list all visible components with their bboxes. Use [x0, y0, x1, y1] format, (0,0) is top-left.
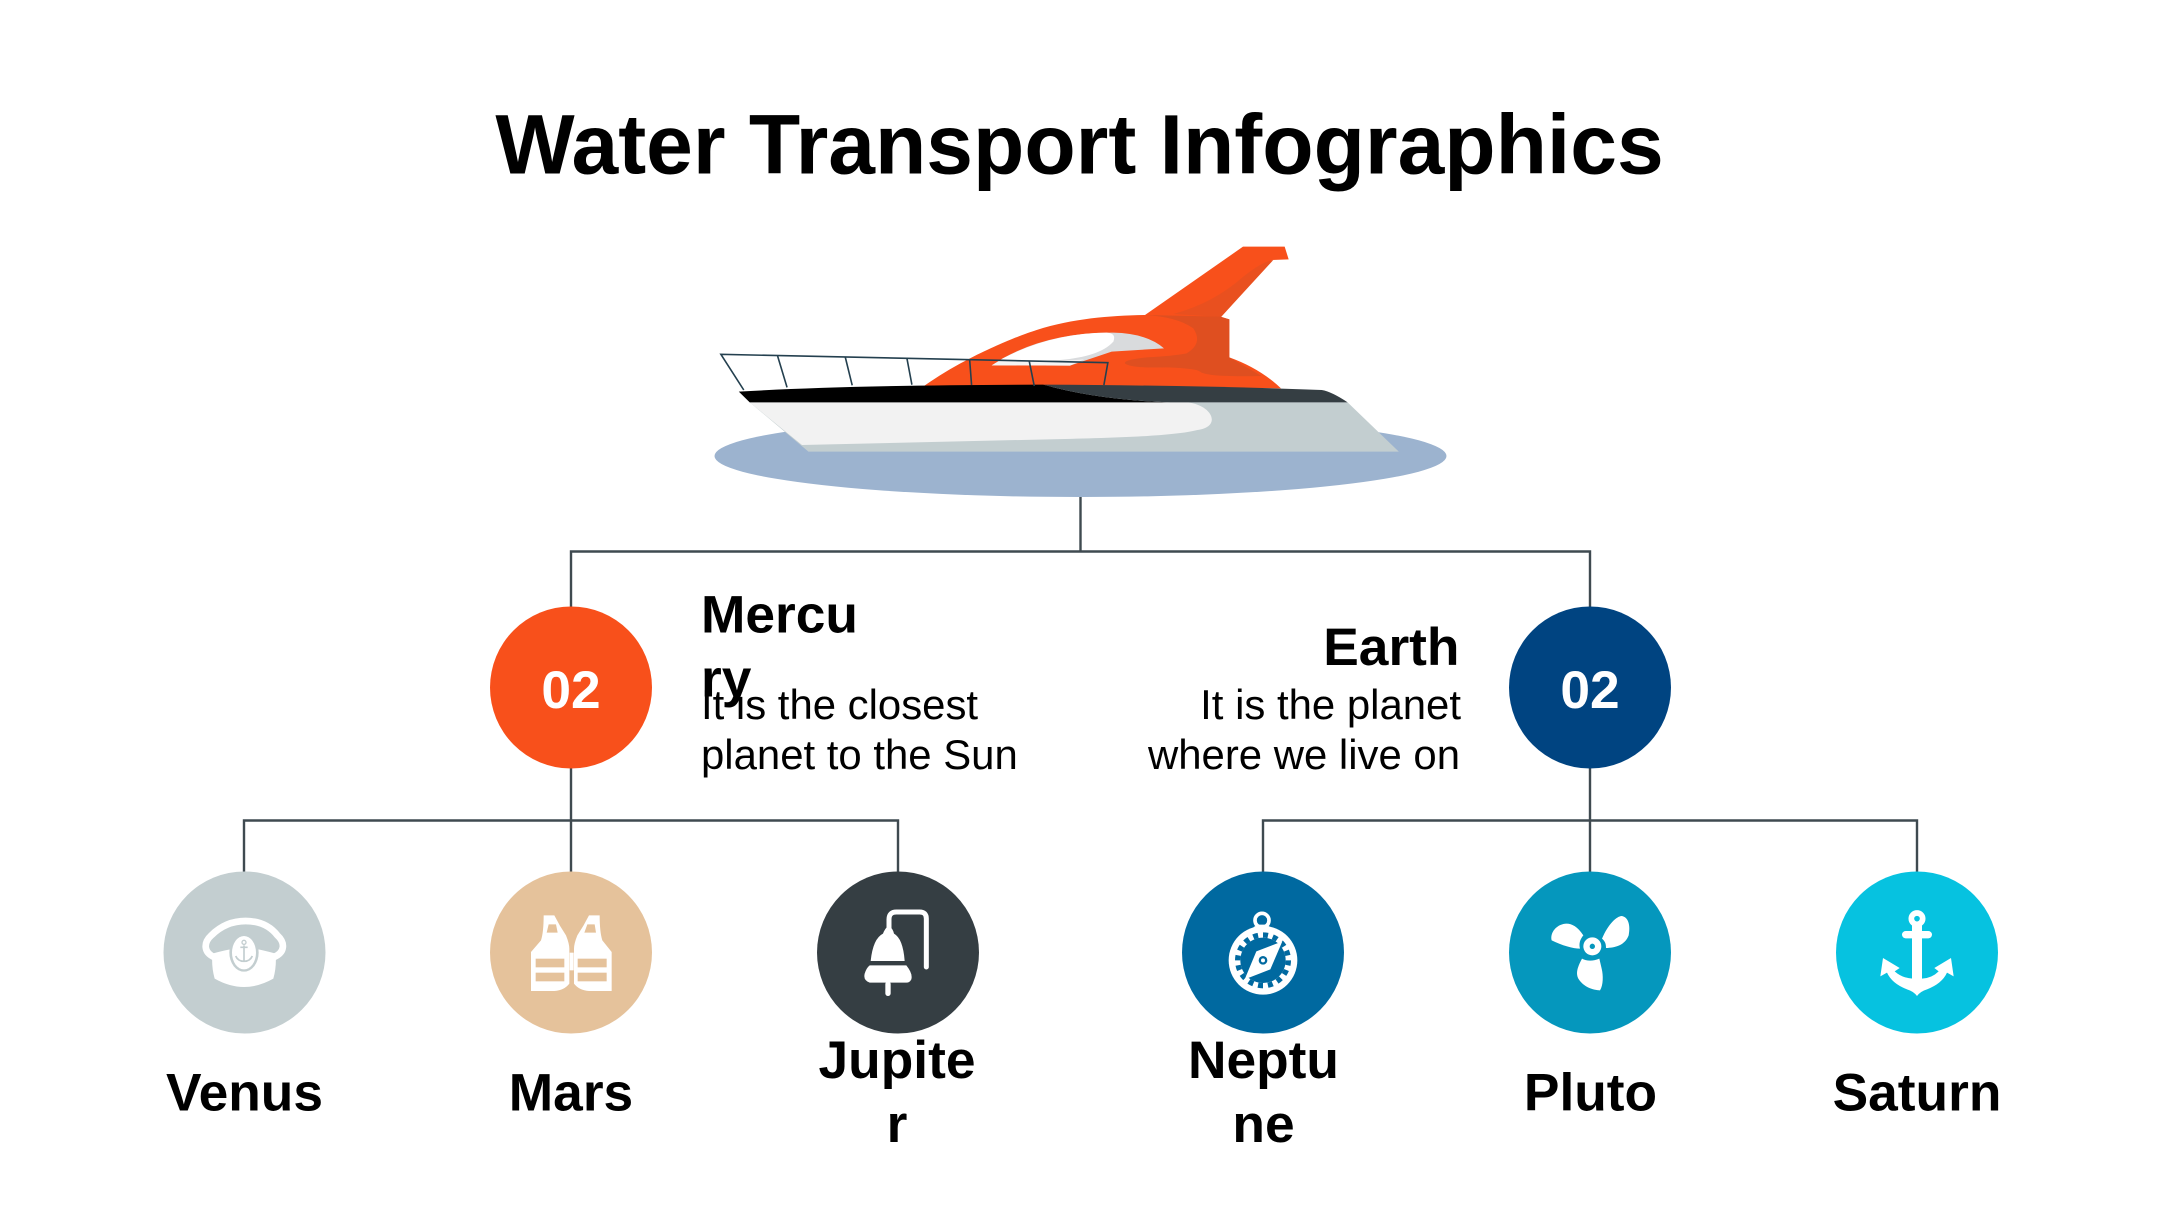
- circle: Earth number: 02: [1560, 661, 1620, 720]
- label: ne: [1232, 1095, 1295, 1154]
- circle: Mercury number: 02: [541, 661, 601, 720]
- connector lines: [244, 497, 1917, 872]
- illustration: yacht on water: [714, 247, 1446, 497]
- node: Mars: [490, 872, 652, 1122]
- node: Saturn: [1833, 872, 2001, 1122]
- icon: ship bell: [864, 912, 926, 996]
- icon: propeller: [1551, 916, 1629, 990]
- label: Neptu: [1188, 1031, 1339, 1090]
- label: r: [887, 1095, 907, 1154]
- node: Jupiter: [817, 872, 979, 1154]
- yacht hull: [739, 385, 1399, 452]
- node: Pluto: [1509, 872, 1671, 1122]
- label: Venus: [166, 1064, 323, 1122]
- water ellipse: [714, 415, 1446, 497]
- icon: compass: [1229, 913, 1297, 995]
- label: [819, 1031, 975, 1154]
- text: Earth: It is the planet: [1200, 681, 1461, 728]
- text: Earth: where we live on: [1147, 731, 1460, 778]
- icon: anchor: [1880, 913, 1954, 996]
- circle: Earth number: [1509, 606, 1671, 768]
- text: Mercury: ry: [701, 650, 752, 708]
- text: Earth: Earth: [1323, 618, 1460, 677]
- yacht railing: [721, 354, 1108, 390]
- text: Mercury: Mercu: [701, 586, 858, 644]
- circle: Mercury number: [490, 606, 652, 768]
- text: Earth: [1147, 618, 1461, 778]
- label: Pluto: [1524, 1064, 1657, 1122]
- node: Neptune: [1182, 872, 1344, 1154]
- text: Mercury: [701, 586, 1018, 778]
- text: Mercury: It is the closest: [701, 681, 978, 728]
- icon: captain cap: [206, 921, 283, 987]
- node: Venus: [164, 872, 326, 1122]
- icon: life vest: [531, 915, 612, 991]
- text: Mercury: planet to the Sun: [701, 731, 1018, 778]
- label: [1188, 1031, 1339, 1154]
- title: Water Transport Infographics: [495, 98, 1664, 192]
- label: Jupite: [819, 1031, 975, 1090]
- label: Saturn: [1833, 1064, 2001, 1122]
- label: Mars: [509, 1064, 633, 1122]
- yacht superstructure: [924, 247, 1289, 388]
